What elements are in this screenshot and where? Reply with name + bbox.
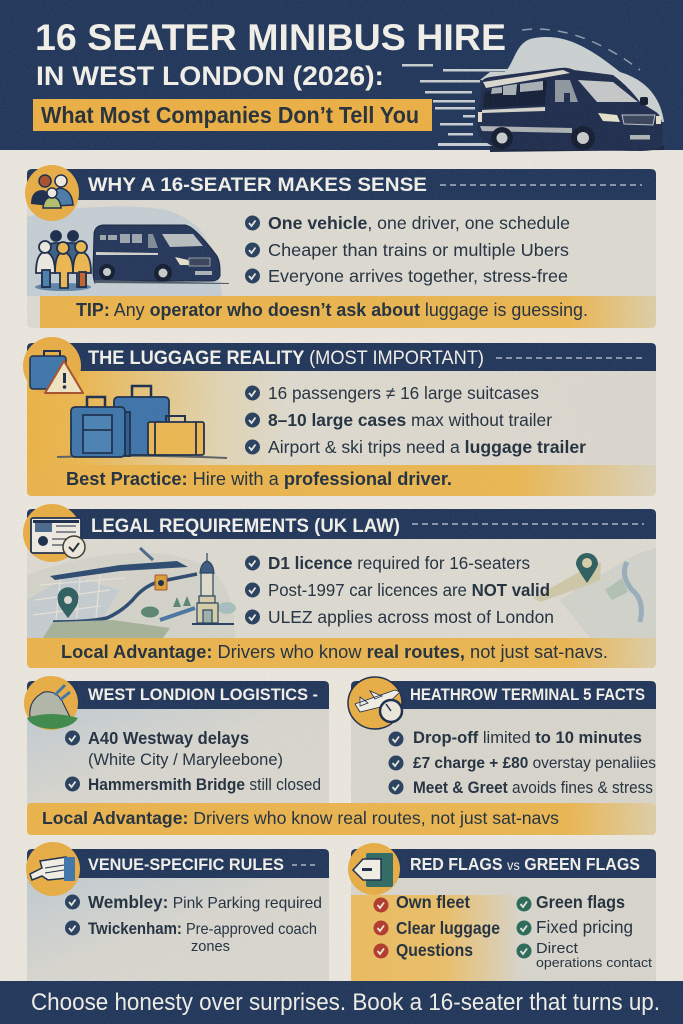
checklist: ULEZ applies across most of London bbox=[268, 607, 554, 627]
panel: why a 16-seater bbox=[25, 165, 656, 328]
section heading: WHY A 16-SEATER MAKES SENSE bbox=[88, 175, 427, 196]
panel: west london logistics bbox=[24, 676, 329, 810]
section heading: HEATHROW TERMINAL 5 FACTS bbox=[410, 686, 645, 704]
section heading: WEST LONDION LOGISTICS - bbox=[88, 685, 318, 704]
tip band: TIP: Any operator who doesn’t ask about luggage is guessing. bbox=[76, 300, 588, 320]
checklist: Wembley: Pink Parking required bbox=[88, 892, 322, 912]
illustration: suitcases bbox=[57, 386, 227, 458]
section heading: RED FLAGS vs GREEN FLAGS bbox=[410, 854, 640, 874]
checklist: Airport & ski trips need a luggage trailer bbox=[268, 437, 586, 457]
icon: suitcase warning bbox=[23, 337, 83, 395]
checklist: Meet & Greet avoids fines & stress bbox=[413, 779, 653, 797]
section heading: THE LUGGAGE REALITY (MOST IMPORTANT) bbox=[88, 348, 484, 369]
checklist: 16 passengers ≠ 16 large suitcases bbox=[268, 383, 539, 403]
icon: group of people bbox=[25, 165, 79, 221]
icon: licence card bbox=[23, 504, 85, 562]
icon: header minibus bbox=[477, 68, 664, 152]
map: west london right bbox=[533, 548, 656, 638]
header banner bbox=[0, 0, 683, 152]
local advantage band bbox=[27, 803, 656, 835]
red flags list: Clear luggage bbox=[396, 918, 500, 938]
checklist: Post-1997 car licences are NOT valid bbox=[268, 580, 550, 600]
checklist bbox=[245, 383, 586, 457]
panel: luggage reality bbox=[23, 337, 656, 496]
map: west london left bbox=[27, 548, 236, 638]
section heading bbox=[27, 509, 656, 539]
section heading bbox=[27, 343, 656, 371]
panel: legal requirements bbox=[23, 504, 656, 668]
speed lines bbox=[402, 64, 507, 146]
checklist: 8–10 large cases max without trailer bbox=[268, 410, 552, 430]
icon: location pin bbox=[576, 553, 598, 583]
checklist bbox=[65, 892, 322, 955]
local advantage band: Local Advantage: Drivers who know real routes, not just sat-navs bbox=[42, 808, 559, 828]
vehicle backdrop bbox=[27, 206, 222, 296]
subtitle band: What Most Companies Don’t Tell You bbox=[41, 102, 419, 128]
green flags list: Direct bbox=[536, 941, 578, 957]
checklist: Drop-off limited to 10 minutes bbox=[413, 729, 642, 747]
green flags list: Fixed pricing bbox=[536, 917, 633, 937]
icon: bridge map bbox=[24, 676, 78, 730]
red flags list: Questions bbox=[396, 940, 473, 960]
panel: red flags vs green flags bbox=[348, 843, 656, 982]
title line 1: 16 SEATER MINIBUS HIRE bbox=[35, 17, 506, 58]
section heading bbox=[27, 681, 329, 709]
panel: heathrow terminal 5 bbox=[348, 677, 656, 810]
icon: tower landmark bbox=[192, 553, 234, 624]
section heading bbox=[351, 681, 656, 709]
section heading bbox=[351, 849, 656, 878]
checklist: Everyone arrives together, stress-free bbox=[268, 266, 568, 286]
best practice band bbox=[27, 465, 656, 496]
green flags list: Green flags bbox=[536, 892, 625, 912]
checklist: £7 charge + £80 overstay penaliies bbox=[413, 755, 656, 772]
local advantage band: Local Advantage: Drivers who know real routes, not just sat-navs. bbox=[61, 642, 608, 662]
section heading bbox=[27, 169, 656, 200]
icon: venue parking bbox=[26, 842, 80, 896]
checklist bbox=[65, 728, 321, 794]
icon: plane and clock bbox=[348, 677, 402, 729]
best practice band: Best Practice: Hire with a professional driver. bbox=[66, 468, 452, 489]
icon: flag tag bbox=[348, 843, 400, 895]
section heading: VENUE-SPECIFIC RULES bbox=[88, 855, 284, 874]
title line 2: IN WEST LONDON (2026): bbox=[36, 61, 384, 91]
checklist bbox=[245, 553, 554, 627]
checklist: One vehicle, one driver, one schedule bbox=[268, 213, 570, 233]
icon: location pin bbox=[58, 587, 78, 618]
icon: minibus bbox=[93, 225, 229, 284]
local advantage band bbox=[27, 638, 656, 668]
checklist: Twickenham: Pre-approved coach bbox=[88, 920, 317, 938]
header van backdrop bbox=[480, 37, 664, 122]
checklist: zones bbox=[191, 939, 230, 955]
checklist bbox=[245, 213, 570, 286]
checklist: Cheaper than trains or multiple Ubers bbox=[268, 240, 569, 260]
dashed arc bbox=[522, 29, 640, 70]
checklist: (White City / Maryleebone) bbox=[88, 751, 283, 769]
illustration: passengers bbox=[35, 231, 91, 291]
checklist: D1 licence required for 16-seaters bbox=[268, 553, 530, 573]
section heading bbox=[27, 849, 329, 878]
footer call to action bbox=[0, 981, 683, 1024]
section heading: LEGAL REQUIREMENTS (UK LAW) bbox=[91, 516, 400, 537]
green flags list bbox=[516, 892, 652, 970]
green flags list: operations contact bbox=[536, 955, 652, 970]
tip band bbox=[40, 296, 656, 328]
checklist bbox=[388, 729, 656, 797]
checklist: A40 Westway delays bbox=[88, 728, 249, 748]
red flags list: Own fleet bbox=[396, 892, 470, 912]
checklist: Hammersmith Bridge still closed bbox=[88, 776, 321, 794]
red flags list bbox=[374, 892, 500, 960]
panel: venue-specific rules bbox=[26, 842, 329, 982]
